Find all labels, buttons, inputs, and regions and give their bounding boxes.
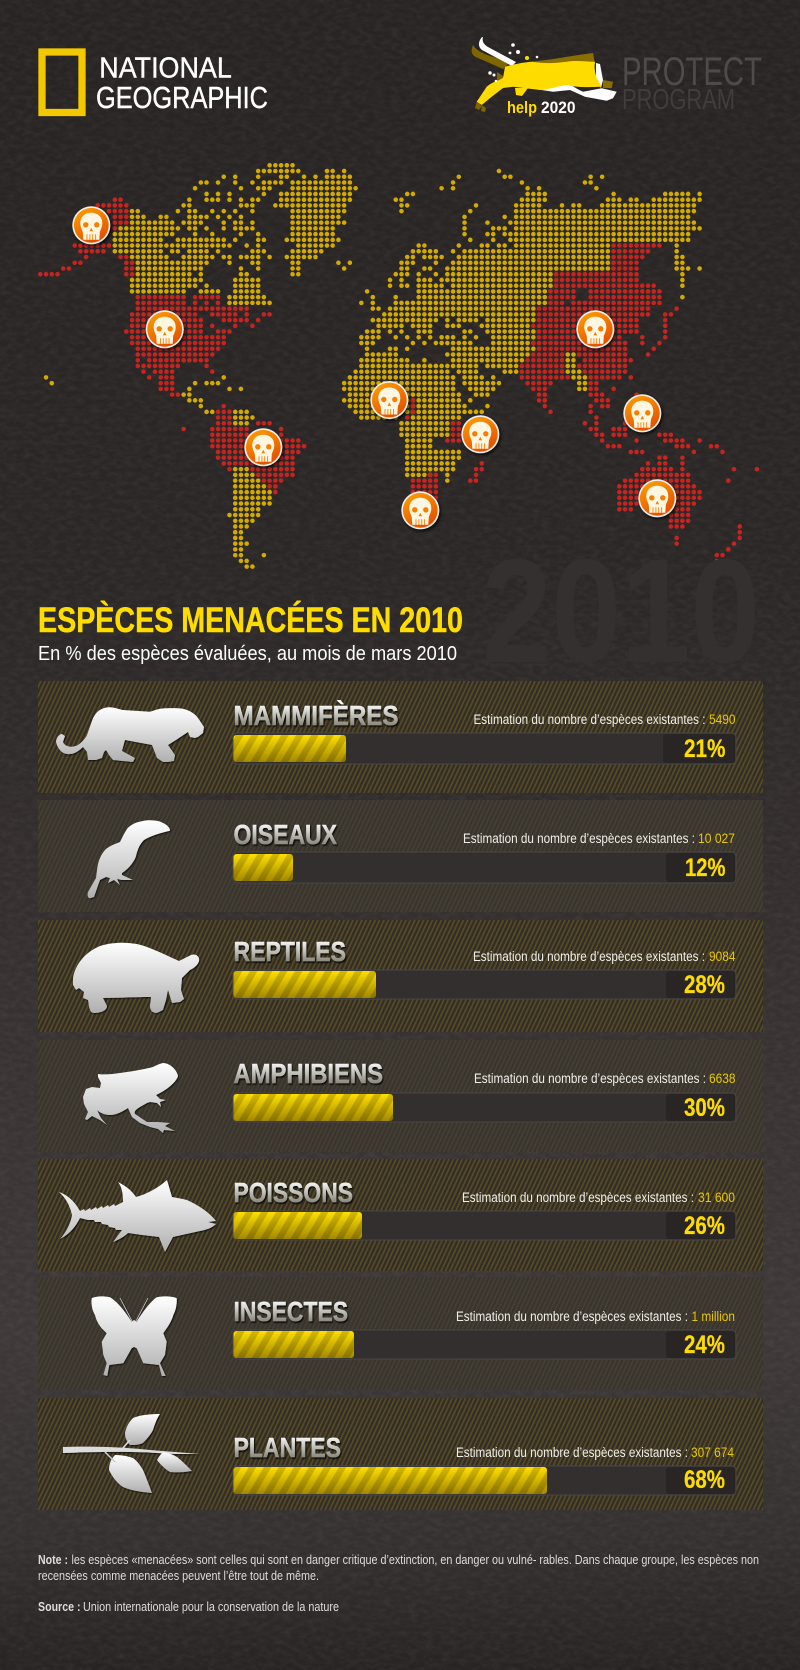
icon: skull marker, South-East Asia xyxy=(623,394,661,432)
icon: frog xyxy=(83,1063,178,1133)
logo: help 2020 protect program xyxy=(472,37,762,117)
subheading: En % des espèces évaluées, au mois de mars 2010 xyxy=(38,642,457,665)
panel: oiseaux xyxy=(38,800,763,912)
bar: 30% xyxy=(233,1093,736,1122)
bar: 21% xyxy=(233,733,736,764)
text: estimate: 307 674 xyxy=(691,1445,734,1460)
note text: Note : xyxy=(38,1553,68,1567)
panel: amphibiens xyxy=(38,1040,763,1152)
note text xyxy=(38,1553,759,1583)
text: estimate: 10 027 xyxy=(698,831,735,846)
icon: skull marker, West Africa xyxy=(370,381,408,419)
icon: toucan xyxy=(88,820,170,898)
bar: 68% xyxy=(233,1466,736,1495)
icon: skull marker, South America xyxy=(244,428,282,466)
logo: National Geographic: GEOGRAPHIC xyxy=(96,81,268,115)
text: estimate: Estimation du nombre d’espèces existantes : xyxy=(474,1071,706,1086)
panel: poissons xyxy=(38,1159,763,1271)
land: unaffected regions (yellow dots) xyxy=(46,165,700,567)
panel: mammifères xyxy=(38,681,763,793)
text: estimate: 6638 xyxy=(709,1071,736,1086)
logo: National Geographic xyxy=(42,52,268,115)
title: reptiles: REPTILES xyxy=(234,936,346,967)
bar: 28% xyxy=(233,970,736,999)
bar: 28%: 28% xyxy=(684,971,725,999)
icon: leopard xyxy=(56,707,204,762)
text: estimate: Estimation du nombre d’espèces existantes : xyxy=(456,1445,688,1460)
text: estimate: 31 600 xyxy=(698,1190,735,1205)
text: estimate: Estimation du nombre d’espèces existantes : xyxy=(474,712,706,727)
icon: leafy branch xyxy=(63,1414,200,1493)
panel: reptiles xyxy=(38,920,763,1032)
text: estimate: Estimation du nombre d’espèces existantes : xyxy=(463,831,695,846)
text: estimate: 9084 xyxy=(709,949,736,964)
icon: skull marker, South Africa xyxy=(401,491,439,529)
icon: skull marker, Australia xyxy=(638,479,676,517)
icon: tuna xyxy=(59,1180,216,1252)
text: help 2020 xyxy=(507,98,576,117)
icon: leaping antelope xyxy=(472,37,617,112)
bar: 21%: 21% xyxy=(684,735,726,763)
source text: Union internationale pour la conservation de la nature xyxy=(83,1600,339,1614)
text: protect program: PROGRAM xyxy=(622,84,735,116)
bar: 12%: 12% xyxy=(685,854,726,882)
icon: skull marker, East Africa xyxy=(461,415,499,453)
title: poissons: POISSONS xyxy=(234,1177,353,1208)
icon: turtle xyxy=(73,943,199,1013)
bar: 12% xyxy=(233,852,736,883)
panel: insectes xyxy=(38,1277,763,1390)
text: protect program xyxy=(622,50,762,116)
chart: dotted world map xyxy=(40,165,757,567)
bar: 68%: 68% xyxy=(684,1466,725,1494)
title: plantes: PLANTES xyxy=(234,1432,341,1463)
bar: 26%: 26% xyxy=(684,1212,725,1240)
icon: skull marker, China xyxy=(576,310,614,348)
land: high-risk regions (red dots) xyxy=(40,200,757,561)
heading: ESPÈCES MENACÉES EN 2010 xyxy=(38,600,463,640)
icon: skull marker, North America xyxy=(146,310,184,348)
text: help 2020: 2020 xyxy=(541,98,576,117)
text: estimate: Estimation du nombre d’espèces existantes : xyxy=(462,1190,694,1205)
title: amphibiens: AMPHIBIENS xyxy=(234,1058,383,1089)
source text: Source : xyxy=(38,1600,80,1614)
title: insectes: INSECTES xyxy=(234,1296,348,1327)
text: estimate: Estimation du nombre d’espèces existantes : xyxy=(456,1309,688,1324)
text: estimate: 5490 xyxy=(709,712,736,727)
title: oiseaux: OISEAUX xyxy=(234,819,337,850)
note text: recensées comme menacées peuvent l’être tout de même. xyxy=(38,1569,319,1583)
bar: 24%: 24% xyxy=(684,1331,725,1359)
icon: skull marker, Alaska xyxy=(72,206,110,244)
title: mammifères: MAMMIFÈRES xyxy=(234,700,398,731)
bar: 30%: 30% xyxy=(684,1094,725,1122)
panel: plantes xyxy=(38,1398,763,1510)
bar: 24% xyxy=(233,1330,736,1359)
bar: 26% xyxy=(233,1211,736,1240)
logo: National Geographic: NATIONAL xyxy=(99,52,232,84)
text: estimate: 1 million xyxy=(692,1309,735,1324)
text: estimate: Estimation du nombre d’espèces existantes : xyxy=(473,949,705,964)
text: help 2020: help xyxy=(507,98,537,117)
icon: butterfly xyxy=(91,1296,177,1376)
